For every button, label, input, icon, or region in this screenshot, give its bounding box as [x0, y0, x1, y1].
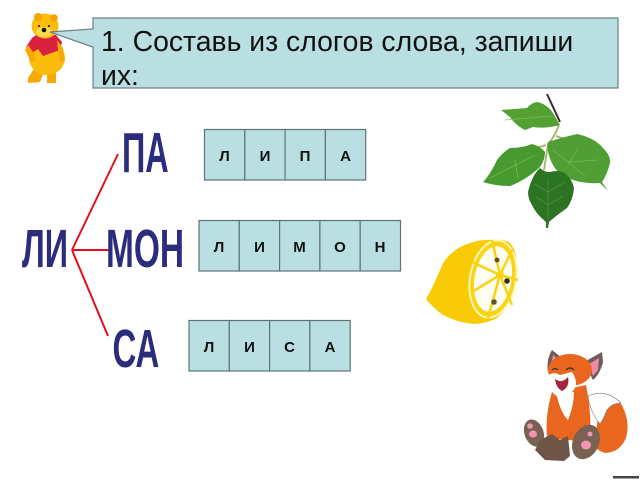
word grid: ЛИСА: И [244, 339, 255, 356]
syllable: ПА: ПА [122, 120, 169, 184]
word grid: ЛИМОН [199, 220, 400, 271]
image: cartoon fox [520, 350, 639, 478]
syllable: ЛИ: ЛИ [22, 220, 68, 279]
word grid: ЛИПА: П [300, 148, 310, 165]
icon: Winnie the Pooh [25, 13, 65, 83]
word grid: ЛИМОН: М [293, 239, 306, 256]
word grid: ЛИМОН: Н [375, 239, 385, 256]
word grid: ЛИПА: А [340, 148, 351, 165]
word grid: ЛИСА: А [325, 339, 336, 356]
word grid: ЛИМОН: О [334, 239, 346, 256]
word grid: ЛИПА: И [260, 148, 270, 165]
word grid: ЛИПА: Л [219, 148, 230, 165]
callout: task instruction: 1. Составь из слогов слова, запиши [101, 26, 573, 58]
connector lines [72, 154, 118, 336]
word grid: ЛИСА: С [284, 339, 295, 356]
image: lemon [426, 235, 524, 324]
word grid: ЛИСА [189, 320, 350, 371]
word grid: ЛИПА [204, 130, 366, 180]
image: linden leaves [483, 94, 610, 228]
word grid: ЛИСА: Л [204, 339, 214, 356]
callout: task instruction [50, 18, 618, 92]
callout: task instruction: их: [101, 60, 139, 92]
word grid: ЛИМОН: Л [214, 239, 224, 256]
word grid: ЛИМОН: И [254, 239, 265, 256]
syllable: СА: СА [112, 320, 159, 379]
syllable: МОН: МОН [106, 218, 184, 279]
